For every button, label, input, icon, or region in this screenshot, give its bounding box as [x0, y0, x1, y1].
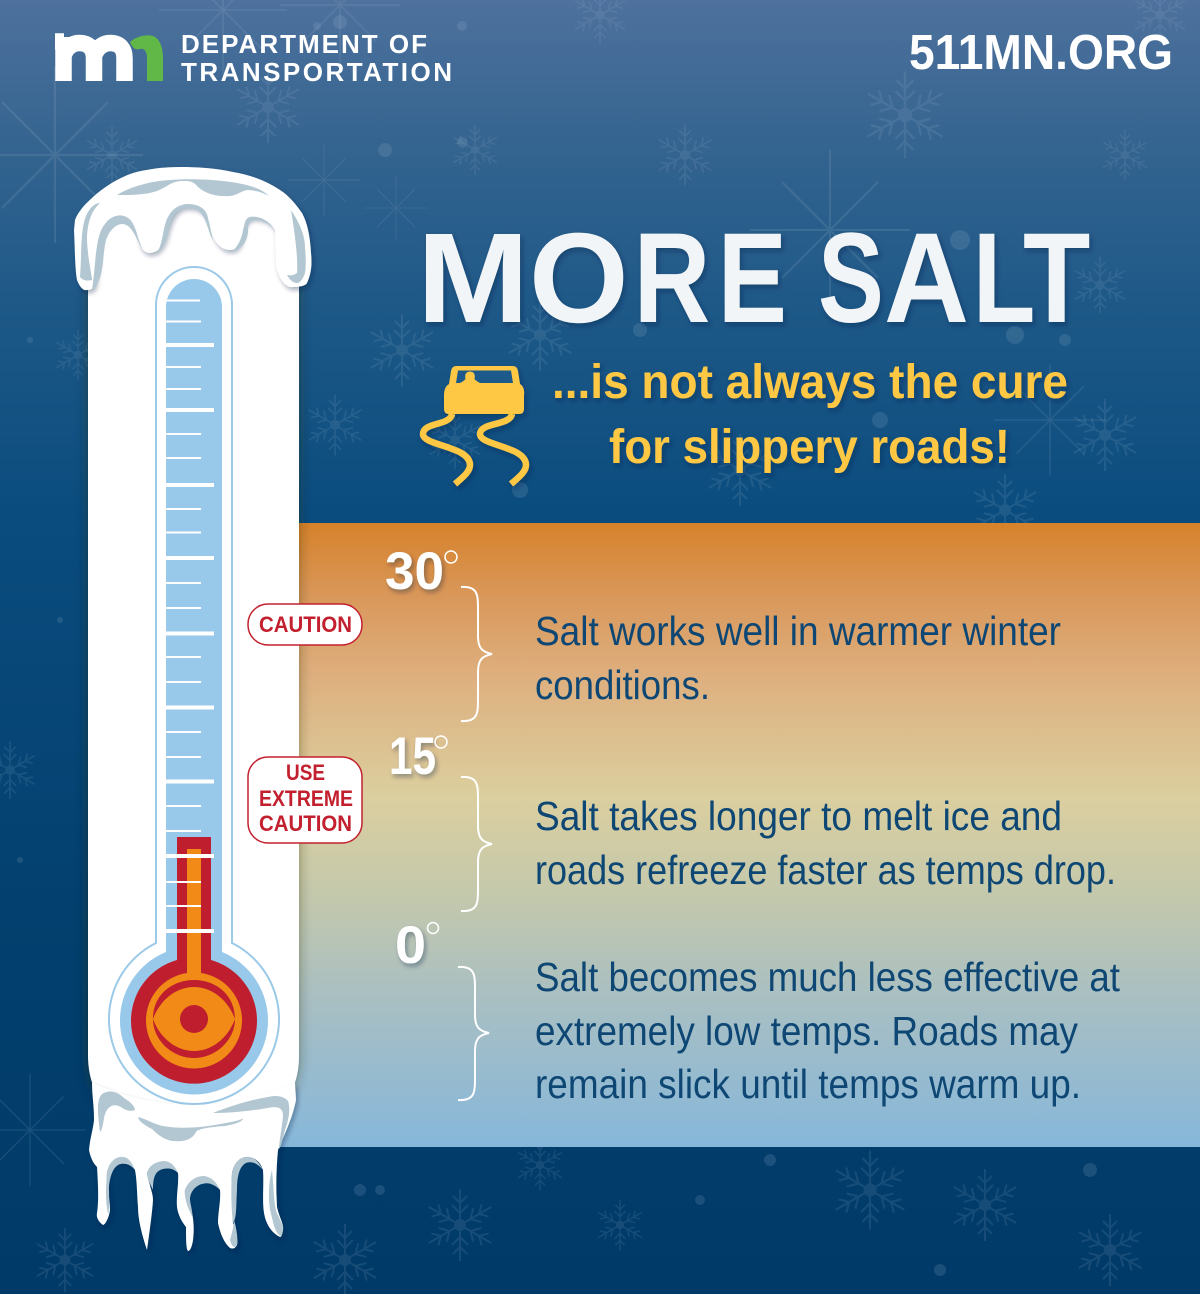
snow cap: [74, 167, 312, 290]
badge: caution: CAUTION: [259, 612, 352, 637]
tick marks: [166, 300, 214, 931]
temperature label: 0 degrees: 0: [395, 916, 426, 975]
icon: sliding car: [423, 366, 526, 484]
tube liquid background: [120, 279, 268, 1094]
title: S: [818, 207, 884, 350]
mercury: [131, 837, 257, 1084]
ice at base: [89, 1083, 296, 1251]
title: L: [973, 207, 1035, 350]
description: extreme cold range: extremely low temps. Roads may: [535, 1008, 1078, 1054]
badge: use extreme caution: USE: [286, 760, 325, 785]
department name: TRANSPORTATION: [181, 57, 452, 87]
icon: mn logo mark: [55, 35, 163, 81]
subtitle: ...is not always the cure: [552, 356, 1068, 409]
temperature bracket: 15 to 0: [461, 777, 492, 911]
badge: use extreme caution: EXTREME: [259, 786, 353, 811]
title: R: [634, 207, 710, 350]
badge: caution: [248, 604, 362, 645]
thermometer: [74, 167, 312, 1251]
subtitle: [552, 356, 1068, 474]
thermometer tube outline: [109, 267, 279, 1104]
description: warm range: conditions.: [535, 662, 710, 708]
temperature label: 15 degrees: 15: [389, 727, 436, 786]
website url: 511MN.ORG: [909, 26, 1173, 80]
description: extreme cold range: remain slick until temps warm up.: [535, 1061, 1081, 1107]
subtitle: for slippery roads!: [609, 421, 1010, 474]
description: warm range: Salt works well in warmer winter: [535, 608, 1061, 654]
title: M: [417, 207, 529, 350]
department name: DEPARTMENT OF: [181, 29, 427, 59]
description: cold range: roads refreeze faster as temps drop.: [535, 847, 1116, 893]
title: A: [884, 207, 969, 350]
badge: use extreme caution: CAUTION: [259, 811, 352, 836]
temperature bracket: below 0: [458, 967, 489, 1100]
description: extreme cold range: Salt becomes much less effective at: [535, 954, 1121, 1000]
title: T: [1023, 207, 1090, 350]
temperature label: 30 degrees: 30: [385, 542, 444, 601]
title: E: [718, 207, 787, 350]
temperature label: 0 degrees: [395, 916, 438, 975]
title: O: [529, 207, 629, 350]
badge: use extreme caution: [248, 757, 362, 843]
gradient temperature panel: [280, 523, 1200, 1147]
description: cold range: Salt takes longer to melt ice and: [535, 793, 1062, 839]
logo: mn mark and department name: [55, 29, 452, 87]
thermometer body: [88, 200, 299, 1110]
temperature bracket: 30 to 15: [461, 587, 492, 721]
